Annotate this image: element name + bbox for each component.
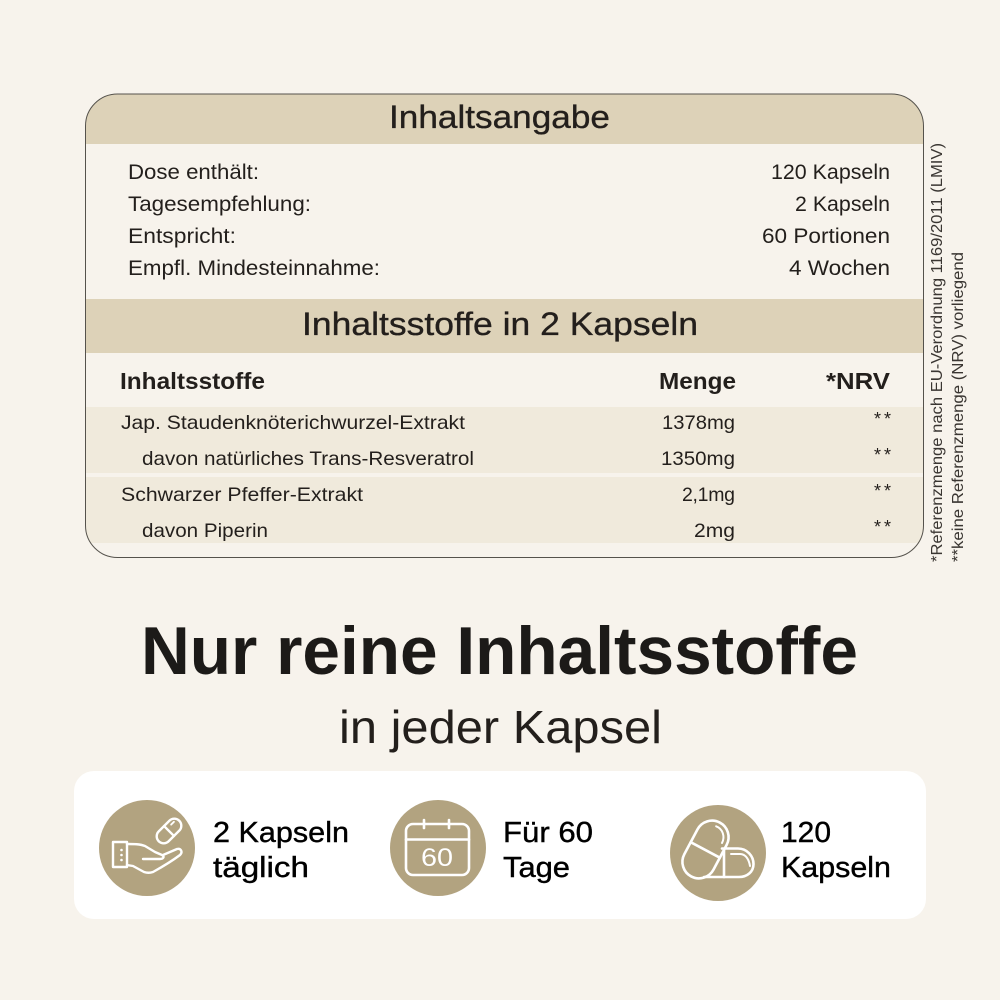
- table header row: *NRV: [826, 368, 891, 394]
- table rows: ingredients: Schwarzer Pfeffer-Extrakt: [121, 484, 364, 506]
- text block: package information: [128, 161, 890, 280]
- table rows: ingredients: 2mg: [694, 520, 735, 542]
- text block: package information: 4 Wochen: [789, 257, 890, 280]
- table header row: Menge: [659, 368, 736, 394]
- label: Für 60 Tage: [503, 817, 593, 884]
- icon: hand with capsule: [99, 800, 195, 896]
- heading: Inhaltsstoffe in 2 Kapseln: Inhaltsstoffe in 2 Kapseln: [302, 306, 698, 342]
- heading: Inhaltsangabe: Inhaltsangabe: [389, 99, 610, 135]
- text block: package information: Tagesempfehlung:: [128, 193, 311, 216]
- table rows: ingredients: **: [874, 517, 892, 537]
- footnotes: *Referenzmenge nach EU-Verordnung 1169/2011 (LMIV): [929, 143, 946, 562]
- subheadline: in jeder Kapsel: [339, 701, 662, 753]
- label: 120 Kapseln: 120: [781, 817, 831, 849]
- text block: package information: Dose enthält:: [128, 161, 259, 184]
- label: 2 Kapseln täglich: 2 Kapseln: [213, 817, 349, 849]
- table rows: ingredients: davon natürliches Trans-Resveratrol: [142, 448, 474, 470]
- label: Für 60 Tage: Tage: [503, 852, 570, 884]
- footnotes: [929, 143, 967, 562]
- label: 2 Kapseln täglich: [213, 817, 349, 884]
- table rows: ingredients: **: [874, 445, 892, 465]
- table header row: [120, 368, 891, 394]
- text block: package information: 60 Portionen: [762, 225, 890, 248]
- label: 2 Kapseln täglich: täglich: [213, 852, 309, 884]
- text block: package information: Entspricht:: [128, 225, 236, 248]
- panel: nutrition table: [85, 94, 924, 558]
- text block: package information: Empfl. Mindesteinnahme:: [128, 257, 380, 280]
- table rows: ingredients: **: [874, 409, 892, 429]
- table rows: ingredients: 1350mg: [661, 448, 735, 470]
- label: Für 60 Tage: Für 60: [503, 817, 593, 849]
- panel: dosage facts: [74, 771, 926, 919]
- table rows: ingredients: Jap. Staudenknöterichwurzel-Extrakt: [121, 412, 466, 434]
- footnotes: **keine Referenzmenge (NRV) vorliegend: [950, 252, 967, 562]
- text block: package information: 2 Kapseln: [795, 193, 890, 216]
- label: 120 Kapseln: [781, 817, 891, 884]
- table rows: ingredients: **: [874, 481, 892, 501]
- table rows: ingredients: 1378mg: [662, 412, 735, 434]
- icon: capsules: [670, 805, 766, 901]
- icon: calendar 60: 60: [421, 844, 453, 872]
- text block: package information: 120 Kapseln: [771, 161, 890, 184]
- label: 120 Kapseln: Kapseln: [781, 852, 891, 884]
- icon: calendar 60: [390, 800, 486, 896]
- table rows: ingredients: davon Piperin: [142, 520, 268, 542]
- table rows: ingredients: 2,1mg: [682, 484, 735, 506]
- table rows: ingredients: [121, 409, 892, 542]
- headline: Nur reine Inhaltsstoffe: [141, 613, 858, 689]
- table header row: Inhaltsstoffe: [120, 368, 265, 394]
